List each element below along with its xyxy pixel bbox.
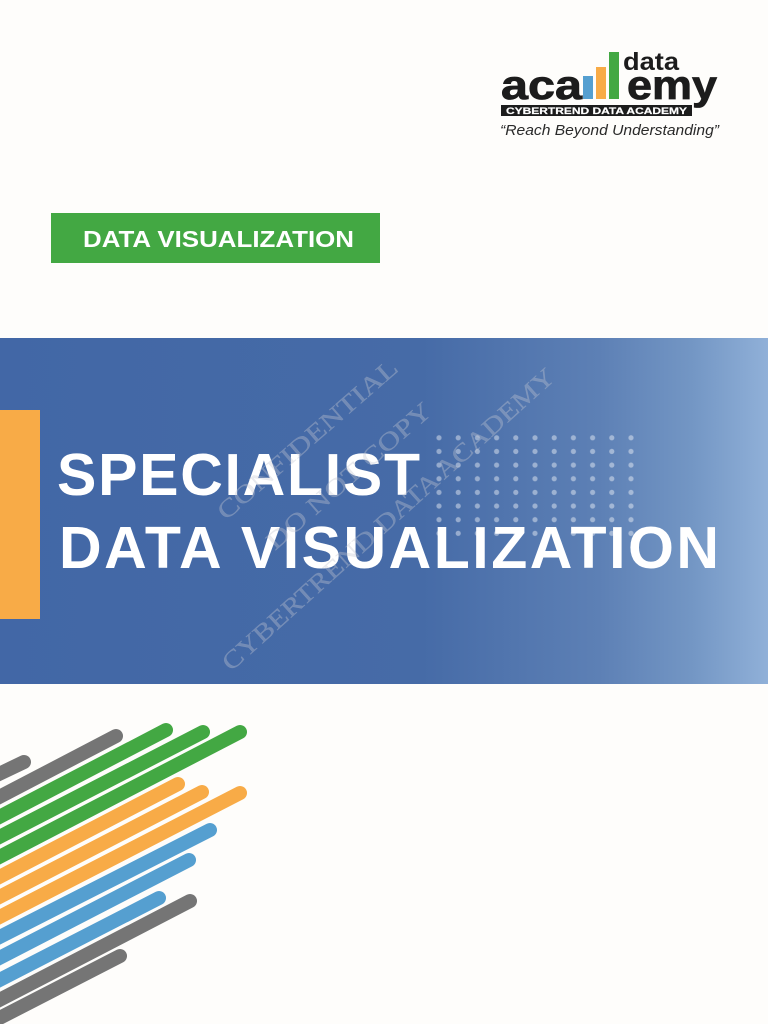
- logo word: data: data: [623, 48, 680, 76]
- watermark: [212, 354, 561, 676]
- title banner: [0, 338, 768, 684]
- watermark: DO NOT COPY: [261, 397, 437, 556]
- orange stripes: [0, 784, 240, 927]
- green stripes: [0, 730, 240, 867]
- title text: SPECIALIST: [57, 442, 420, 508]
- dot grid decoration: [429, 431, 641, 540]
- logo tagline: “Reach Beyond Understanding”: [500, 122, 720, 139]
- logo bar chart icon: [583, 52, 619, 99]
- title text: [57, 442, 719, 581]
- category tag: data visualization: DATA VISUALIZATION: [83, 226, 354, 252]
- gray stripes top: [0, 736, 116, 807]
- watermark: CYBERTREND DATA ACADEMY: [217, 363, 561, 676]
- watermark: CONFIDENTIAL: [212, 354, 404, 526]
- logo band text: CYBERTREND DATA ACADEMY: [506, 106, 688, 117]
- logo band: [501, 105, 692, 116]
- category tag: data visualization: [51, 213, 380, 263]
- blue stripes: [0, 830, 210, 990]
- gray stripes bottom: [0, 901, 190, 1024]
- diagonal stripes decoration: [0, 730, 240, 1024]
- banner background: [0, 338, 768, 684]
- title text: DATA VISUALIZATION: [59, 515, 719, 581]
- orange accent bar: [0, 410, 40, 619]
- logo: data academy: [500, 48, 720, 139]
- logo word: aca: aca: [501, 62, 583, 108]
- logo word: emy: emy: [627, 62, 717, 108]
